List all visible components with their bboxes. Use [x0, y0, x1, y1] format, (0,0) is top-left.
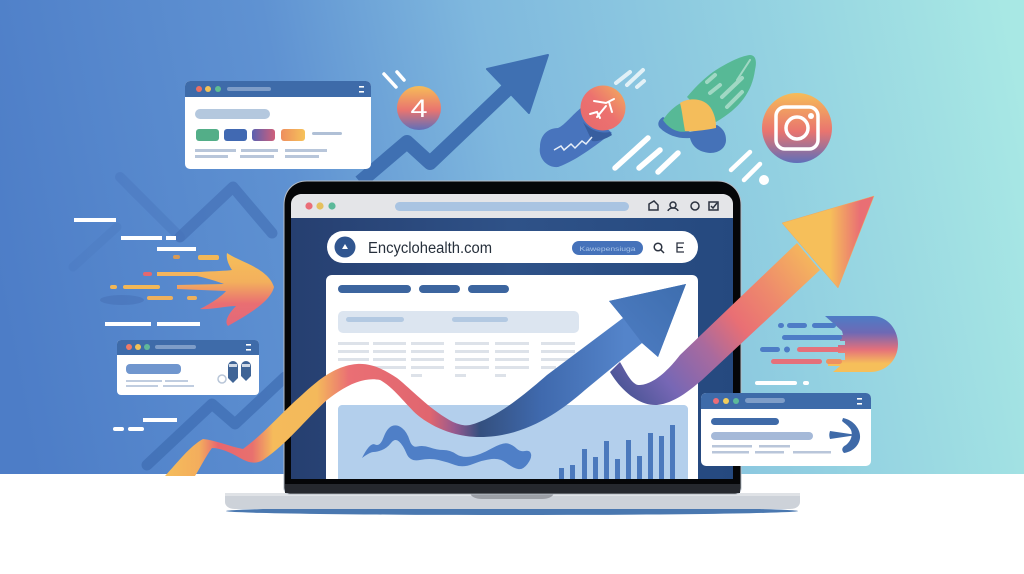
right speed icon: blue to yellow comet: [755, 316, 898, 385]
ribbon arrow: yellow to blue, through laptop: [165, 284, 686, 476]
search bar: Kawepensiuga: [580, 246, 636, 253]
badge: number 4: [384, 72, 441, 130]
background zigzag lines: [73, 177, 285, 465]
badge: chart capsule with orange circle: [540, 70, 644, 167]
big ribbon arrow: purple to yellow: [610, 196, 874, 405]
laptop bezel: [284, 181, 741, 494]
chart panel: wave and bars: [338, 405, 688, 479]
laptop: [225, 181, 800, 515]
browser window: lower left: [117, 340, 259, 395]
search bar: Encyclohealth.com: [368, 240, 492, 257]
search bar: [327, 231, 698, 263]
icon: arrow: [829, 418, 860, 453]
browser window: top left: [185, 81, 371, 169]
left speed lines: [74, 218, 200, 431]
laptop base: [225, 493, 800, 515]
badge: number 4: 4: [410, 95, 428, 123]
icon: instagram logo: [762, 93, 832, 163]
laptop chin: [285, 484, 740, 493]
browser screen: [291, 194, 733, 479]
speed lines under rocket: [615, 138, 769, 185]
icon: orange flame arrow: [100, 253, 274, 326]
content panel: [326, 275, 698, 479]
top blue rising arrow: [360, 55, 548, 182]
icon: green leaf rocket: [658, 55, 756, 153]
toolbar icons: [649, 201, 718, 211]
browser window: lower right: [701, 393, 871, 466]
